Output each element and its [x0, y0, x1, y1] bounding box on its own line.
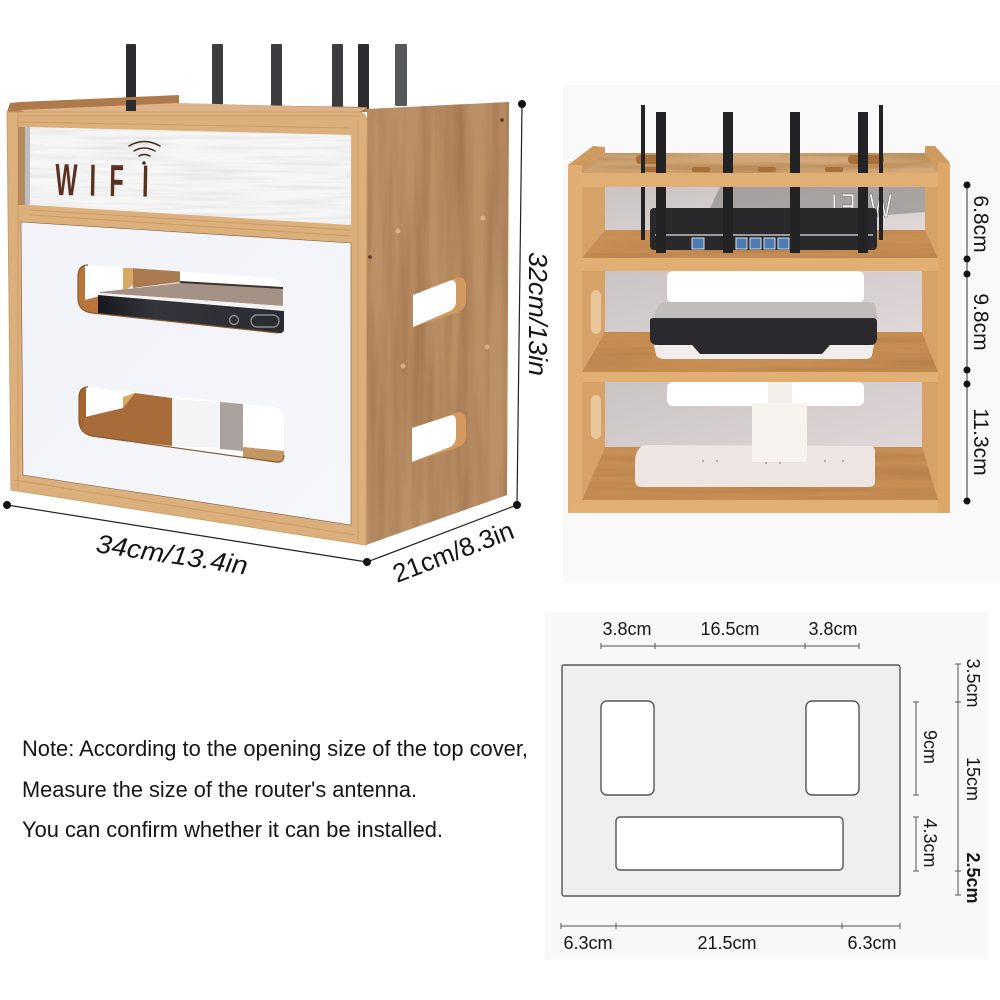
overall height dimensions — [955, 658, 983, 904]
dimension: width 34cm — [3, 501, 371, 581]
upper front opening — [78, 265, 284, 334]
shelf surfaces — [582, 230, 938, 500]
bottom dimensions: 6.3cm — [563, 933, 613, 953]
top dimensions: 16.5cm — [700, 619, 760, 639]
top cover diagram — [561, 619, 983, 953]
note text: You can confirm whether it can be installed. — [22, 817, 443, 842]
side slots — [591, 290, 601, 439]
hole height dimensions — [913, 702, 940, 871]
white cut-outs in back wall — [667, 271, 864, 406]
bottom dimensions: 21.5cm — [697, 933, 757, 953]
outline of openings — [78, 265, 284, 462]
icon: wifi arcs — [129, 142, 160, 164]
antennas — [126, 44, 407, 110]
note text — [22, 736, 528, 842]
top cover — [7, 95, 367, 114]
overall height dimensions: 2.5cm — [963, 852, 983, 904]
top dimensions: 3.8cm — [602, 619, 652, 639]
dimension: width 34cm: 34cm/13.4in — [94, 528, 250, 581]
note text: Measure the size of the router's antenna. — [22, 777, 417, 802]
compartment backs — [582, 187, 938, 500]
power strip with plug — [635, 382, 875, 487]
overall height dimensions: 3.5cm — [963, 658, 983, 708]
diagram backdrop — [545, 612, 988, 959]
mirrored WiFi lettering: WIFI — [827, 188, 892, 225]
shelf height labels: 11.3cm — [969, 408, 992, 476]
bottom dimensions: 6.3cm — [847, 933, 897, 953]
antenna holes — [601, 701, 859, 870]
hole height dimensions: 9cm — [920, 730, 940, 764]
cover plate — [562, 665, 900, 896]
dimension: shelf heights — [964, 182, 992, 504]
top dimensions — [601, 619, 859, 649]
upper white panel — [18, 127, 351, 225]
overall height dimensions: 15cm — [963, 757, 983, 801]
inner side panels — [582, 187, 938, 500]
lower front opening — [80, 387, 284, 462]
side opening: lower — [412, 412, 466, 462]
shelf height labels: 9.8cm — [969, 293, 992, 351]
side opening: upper — [413, 277, 466, 327]
router buttons — [230, 316, 238, 324]
top board front overlay — [638, 173, 885, 187]
front antennas — [641, 105, 883, 253]
shelf height labels — [969, 195, 992, 476]
panel: shelf view — [568, 105, 950, 513]
front frame — [7, 112, 367, 545]
wifi logo text: WIFI — [55, 155, 149, 207]
bottom dimensions — [561, 923, 900, 953]
lower white panel — [21, 222, 351, 525]
router ports — [692, 238, 789, 249]
panel: front view of WiFi box — [7, 44, 509, 545]
note text: Note: According to the opening size of the top cover, — [22, 736, 528, 761]
modem — [650, 302, 877, 359]
frame grain — [14, 112, 360, 540]
shelf height labels: 6.8cm — [969, 195, 992, 253]
side panel — [366, 102, 509, 545]
router — [650, 208, 877, 250]
photo backdrop: shelf view — [563, 85, 1000, 582]
top dimensions: 3.8cm — [808, 619, 858, 639]
dimension: depth 21cm: 21cm/8.3in — [388, 515, 518, 589]
outer frame and top board — [568, 146, 950, 513]
hole height dimensions: 4.3cm — [920, 818, 940, 868]
dimension: height 32cm: 32cm/13in — [523, 252, 553, 376]
dimension: height 32cm — [513, 100, 553, 509]
